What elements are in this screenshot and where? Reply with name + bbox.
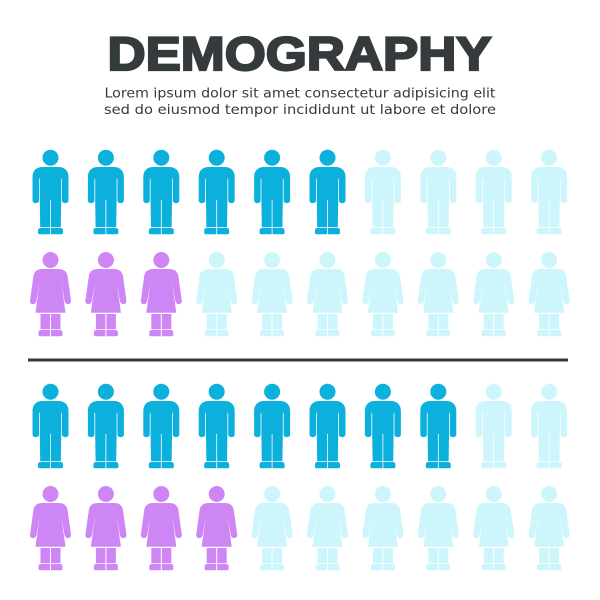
subtitle text <box>104 86 496 118</box>
subtitle text: Lorem ipsum dolor sit amet consectetur adipisicing elit <box>104 86 496 102</box>
row 4: women, 4 of 10 highlighted <box>30 486 570 570</box>
title: DEMOGRAPHY <box>108 28 492 81</box>
row 3: men, 8 of 10 highlighted <box>32 384 567 468</box>
row 1: men, 6 of 10 highlighted <box>32 150 567 234</box>
divider line <box>28 358 568 362</box>
row 2: women, 3 of 10 highlighted <box>30 252 570 336</box>
subtitle text: sed do eiusmod tempor incididunt ut labore et dolore <box>104 102 496 118</box>
